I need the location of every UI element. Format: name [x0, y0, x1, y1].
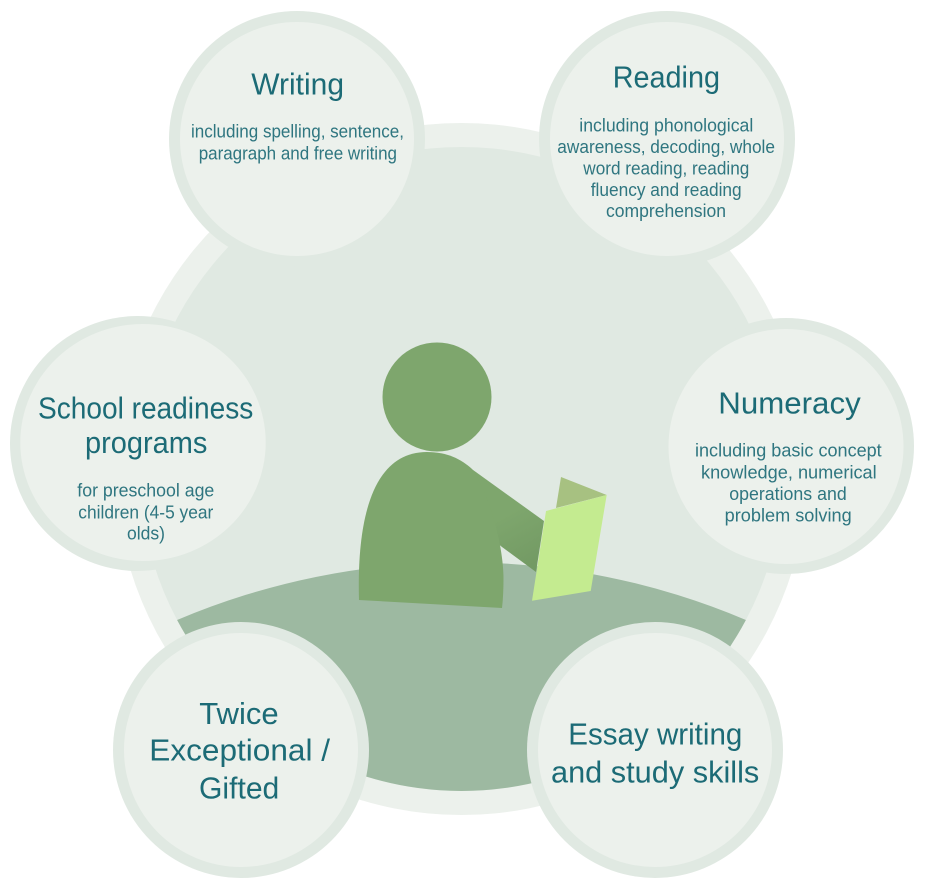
panel background: reading: [550, 22, 784, 256]
text: reading description: awareness, decoding, whole: [557, 137, 775, 157]
panel background: school readiness: [20, 324, 266, 561]
text: numeracy description: [695, 441, 882, 526]
text: numeracy description: operations and: [729, 484, 847, 504]
central disc: [116, 123, 808, 815]
text: school readiness description: olds): [127, 524, 165, 544]
text: reading description: including phonological: [579, 116, 753, 136]
heading: essay writing and study skills: [551, 717, 759, 789]
text: numeracy description: including basic concept: [695, 441, 882, 461]
heading: numeracy: Numeracy: [718, 385, 861, 420]
text: school readiness description: for preschool age: [77, 481, 214, 501]
heading: twice exceptional / gifted: Exceptional /: [149, 733, 330, 768]
text: reading description: word reading, reading: [582, 158, 749, 178]
panel: twice exceptional: [113, 622, 369, 878]
heading: twice exceptional / gifted: Twice: [199, 696, 279, 731]
heading: school readiness programs: [38, 390, 253, 460]
text: writing description: paragraph and free writing: [199, 143, 397, 163]
panel background: writing: [180, 22, 414, 256]
text: reading description: fluency and reading: [591, 180, 742, 200]
text: school readiness description: [77, 481, 214, 544]
text: reading description: [557, 116, 775, 221]
heading: twice exceptional / gifted: [149, 696, 330, 805]
panel background: essay writing: [538, 633, 772, 867]
text: school readiness description: children (4-5 year: [78, 502, 213, 522]
heading: school readiness programs: programs: [85, 425, 207, 460]
panel: writing: [169, 11, 425, 267]
table surface: [177, 562, 746, 791]
text: writing description: including spelling, sentence,: [191, 122, 404, 142]
heading: essay writing and study skills: Essay writing: [568, 717, 742, 752]
panel background: twice exceptional: [124, 633, 358, 867]
figure: person reading a book: [359, 342, 607, 608]
heading: twice exceptional / gifted: Gifted: [199, 770, 279, 805]
icon: book front page: [532, 495, 607, 601]
text: numeracy description: knowledge, numerical: [701, 462, 877, 482]
panel: essay writing: [527, 622, 783, 878]
icon: head: [382, 342, 492, 452]
heading: school readiness programs: School readiness: [38, 390, 253, 425]
heading: essay writing and study skills: and study skills: [551, 754, 759, 789]
icon: body: [359, 452, 504, 608]
text: numeracy description: problem solving: [725, 506, 852, 526]
heading: reading: Reading: [613, 60, 720, 94]
panel: school readiness: [10, 316, 266, 571]
text: reading description: comprehension: [606, 201, 726, 221]
icon: book back page: [556, 477, 607, 508]
panel: reading: [539, 11, 795, 267]
panel background: numeracy: [668, 329, 904, 564]
heading: writing: Writing: [251, 66, 344, 102]
panel: numeracy: [658, 318, 914, 574]
text: writing description: [191, 122, 404, 163]
icon: arm: [470, 469, 544, 572]
